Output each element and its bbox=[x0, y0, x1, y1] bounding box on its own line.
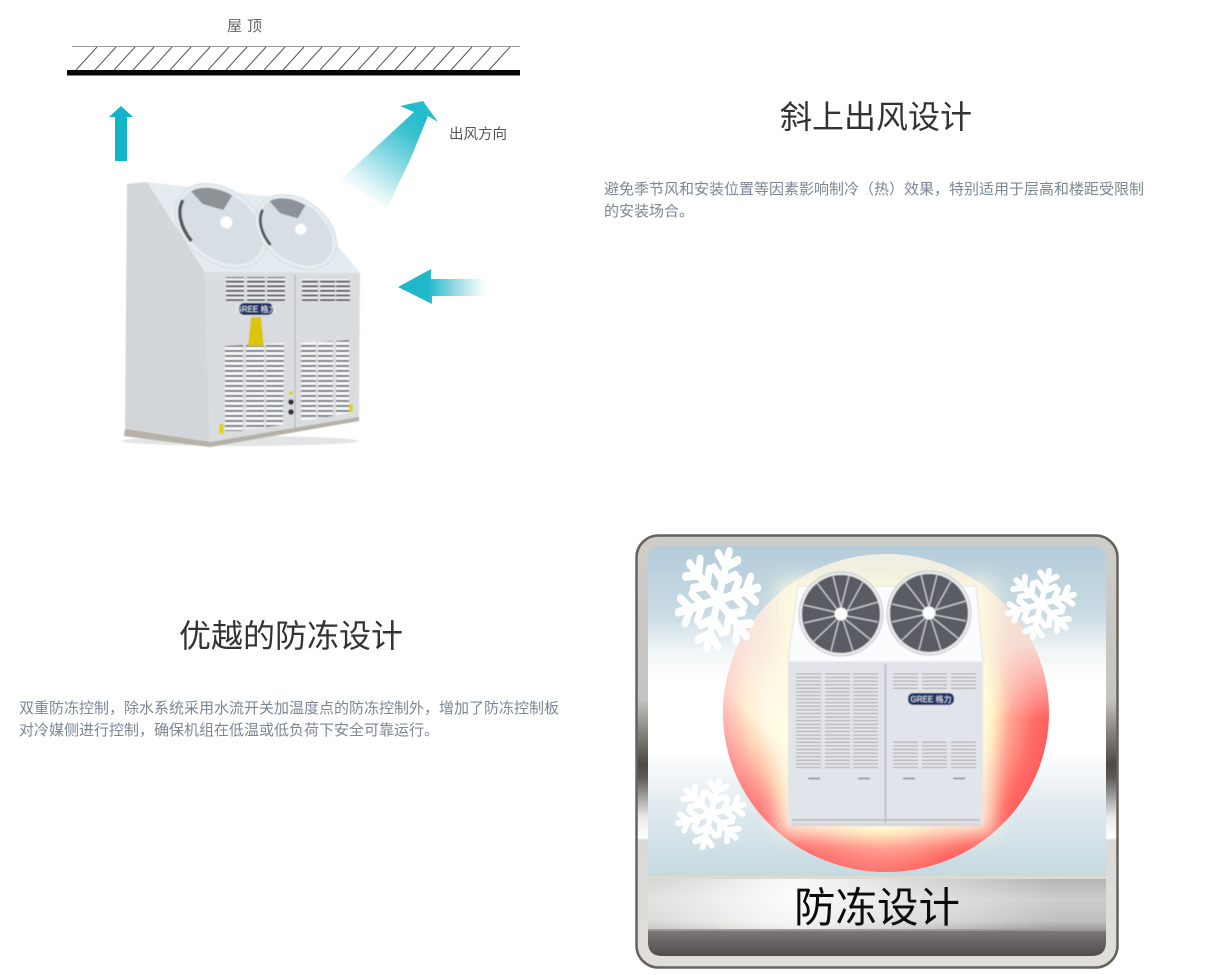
right upper grilles bbox=[893, 671, 976, 690]
right lower grilles bbox=[893, 741, 976, 768]
fan left bbox=[799, 572, 883, 656]
heading: slanted airflow design: 斜上出风设计 bbox=[780, 99, 972, 135]
panel: antifreeze design badge bbox=[636, 536, 1118, 968]
lower grilles bbox=[225, 340, 349, 431]
text: slanted airflow description: 的安装场合。 bbox=[604, 203, 694, 220]
arrow: diagonal airflow bbox=[340, 101, 438, 208]
small labels and ports bbox=[219, 391, 353, 434]
roof hatch bbox=[67, 46, 520, 76]
brand badge: GREE 格力 bbox=[236, 304, 276, 314]
front-view unit bbox=[788, 571, 983, 826]
badge outer frame bbox=[636, 536, 1118, 968]
left tall grilles bbox=[796, 671, 878, 768]
snowflake bottom left bbox=[669, 772, 753, 856]
label: airflow direction: 出风方向 bbox=[449, 126, 507, 143]
text: antifreeze description bbox=[19, 700, 559, 739]
yellow warning label bbox=[248, 317, 264, 346]
unit side panel bbox=[125, 182, 210, 447]
unit top section bbox=[788, 586, 983, 662]
arrow: side air intake bbox=[398, 269, 486, 304]
heading: antifreeze design: 优越的防冻设计 bbox=[179, 618, 403, 654]
text: antifreeze description: 双重防冻控制，除水系统采用水流开关加温度点的防冻控制外，增加了防冻控制板 bbox=[19, 700, 559, 717]
arrow: up airflow bbox=[109, 106, 133, 161]
heat circle bbox=[723, 554, 1049, 872]
fan left bbox=[159, 166, 283, 286]
badge caption: 防冻设计 bbox=[794, 884, 960, 931]
text: slanted airflow description bbox=[604, 181, 1144, 220]
fan right bbox=[241, 179, 351, 285]
fan right bbox=[887, 571, 971, 655]
unit slanted top bbox=[147, 182, 360, 273]
brand badge bbox=[908, 693, 954, 705]
unit base bbox=[124, 417, 359, 447]
badge sky background bbox=[648, 546, 1106, 876]
roof label: 屋顶 bbox=[227, 18, 267, 35]
brand badge: GREE 格力 bbox=[911, 694, 951, 704]
text: antifreeze description: 对冷媒侧进行控制，确保机组在低温或低负荷下安全可靠运行。 bbox=[19, 722, 439, 739]
outdoor unit with slanted top bbox=[122, 166, 360, 447]
snowflake top right bbox=[999, 562, 1083, 646]
handles bbox=[808, 778, 965, 780]
unit shadow bbox=[122, 436, 358, 446]
text: slanted airflow description: 避免季节风和安装位置等因素影响制冷（热）效果，特别适用于层高和楼距受限制 bbox=[604, 181, 1144, 198]
unit front panel bbox=[205, 272, 360, 447]
upper grilles bbox=[226, 277, 350, 301]
badge caption band bbox=[648, 876, 1106, 956]
snowflake top left bbox=[667, 537, 769, 663]
unit body bbox=[788, 662, 983, 826]
